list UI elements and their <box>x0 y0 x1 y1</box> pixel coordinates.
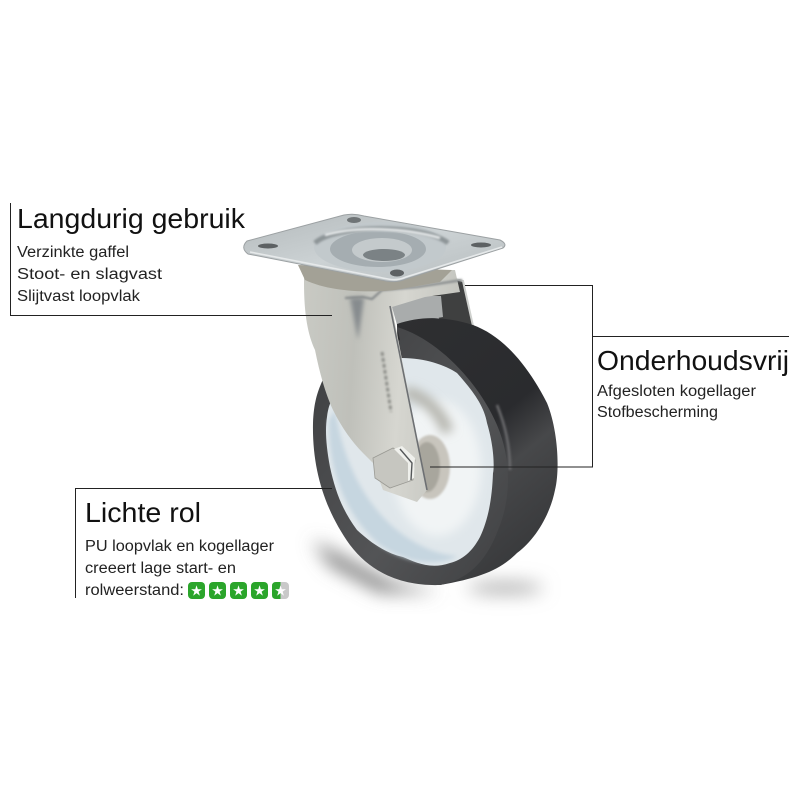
leader line <box>10 203 332 316</box>
callout: Lichte rol <box>76 488 332 600</box>
feature list: Stoot- en slagvast <box>17 266 163 283</box>
swivel fork <box>304 270 462 502</box>
feature list <box>17 244 163 305</box>
star rating: ★ <box>211 584 224 600</box>
heading: Langdurig gebruik <box>17 203 246 234</box>
star rating: ★ <box>232 584 245 600</box>
wheel tread <box>397 318 558 585</box>
floor shadow <box>312 540 543 594</box>
feature list: Verzinkte gaffel <box>17 244 129 261</box>
top plate <box>244 214 505 282</box>
heading: Lichte rol <box>85 497 201 528</box>
feature list <box>597 383 756 421</box>
wheel front ring <box>313 327 508 585</box>
rear fork arm <box>420 275 474 327</box>
feature list: Afgesloten kogellager <box>597 383 756 400</box>
feature list: Stofbescherming <box>597 404 718 421</box>
callout: Onderhoudsvrij <box>430 286 789 467</box>
plate holes <box>347 217 361 223</box>
description: PU loopvlak en kogellager <box>85 538 274 555</box>
leader line <box>430 286 789 467</box>
heading: Onderhoudsvrij <box>597 345 789 376</box>
description <box>85 538 274 599</box>
axle bolt <box>373 446 415 488</box>
tread highlights <box>497 405 510 470</box>
star rating: ★ <box>190 584 203 600</box>
star rating: ★ <box>253 584 266 600</box>
caster wheel photo <box>244 214 558 594</box>
star rating <box>188 582 289 600</box>
star rating: ★ <box>274 584 287 600</box>
description: creeert lage start- en <box>85 560 236 577</box>
callout: Langdurig gebruik <box>10 203 332 316</box>
wheel hub <box>326 358 494 566</box>
mounting plate collar <box>298 265 452 291</box>
leader line <box>76 488 332 598</box>
description: rolweerstand: <box>85 582 184 599</box>
feature list: Slijtvast loopvlak <box>17 288 140 305</box>
